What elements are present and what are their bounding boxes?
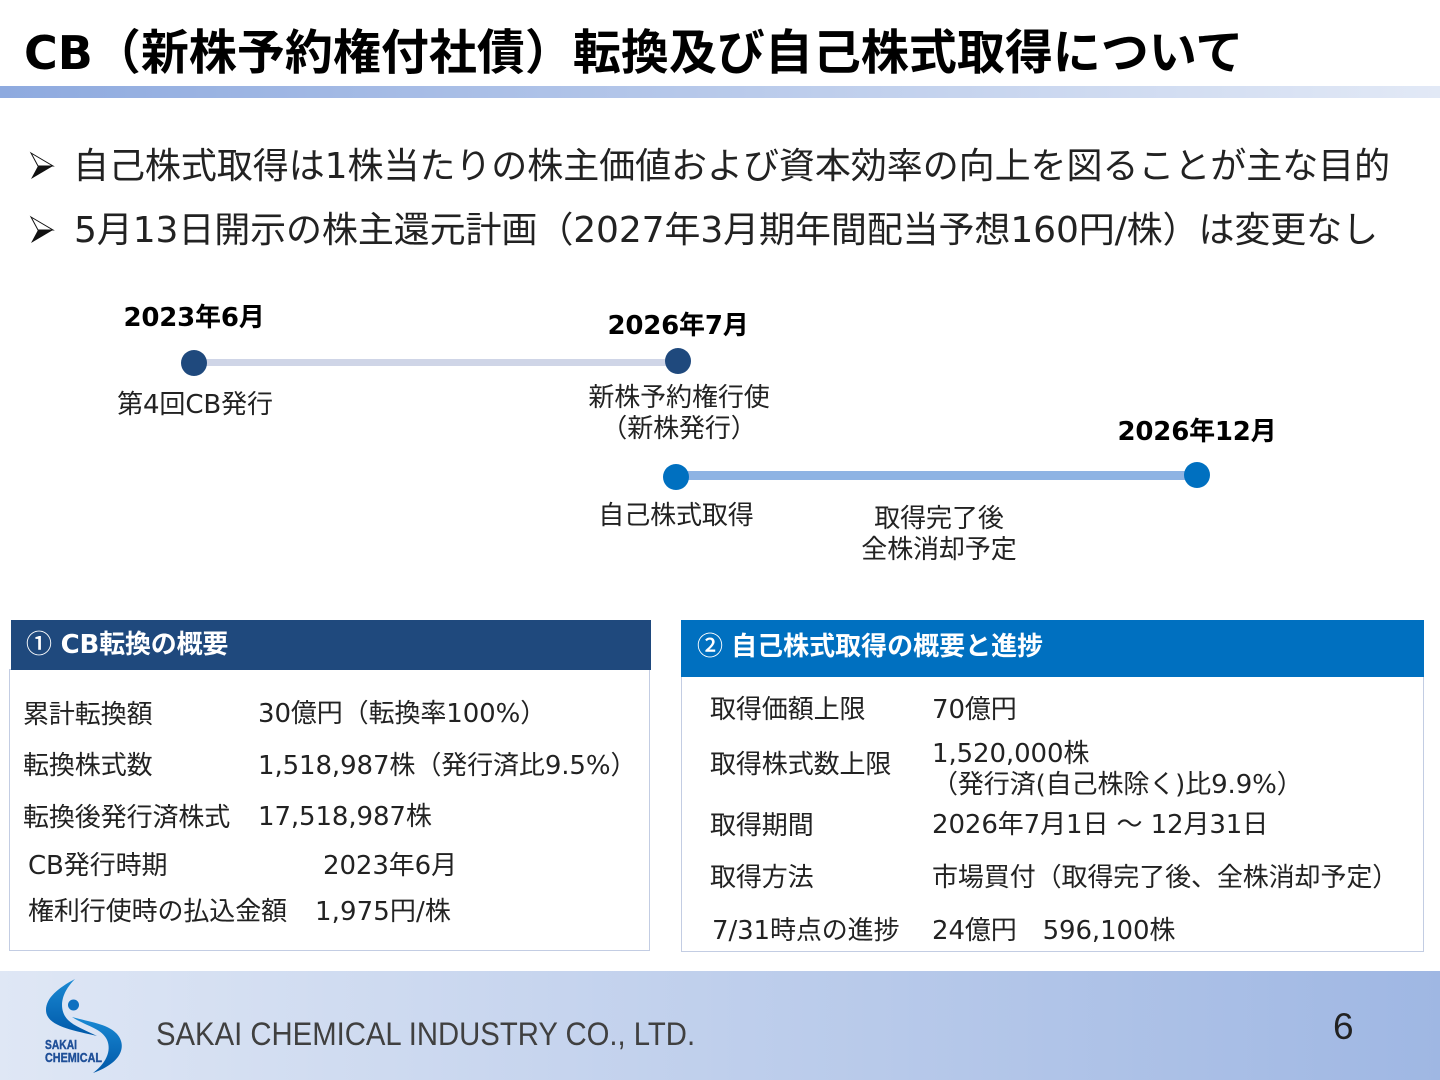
row value: 1,975円/株 xyxy=(315,897,451,927)
row: 転換株式数 xyxy=(23,751,153,781)
page number: 6 xyxy=(1333,1006,1353,1047)
timeline: CB issue to exercise xyxy=(117,303,770,444)
row: 取得期間 xyxy=(710,811,814,841)
milestone dot xyxy=(181,350,207,376)
milestone dot xyxy=(663,464,689,490)
row: 累計転換額 xyxy=(23,700,153,730)
logo text: SAKAI xyxy=(45,1037,77,1052)
row: CB発行時期 xyxy=(28,851,167,881)
row value: 1,518,987株（発行済比9.5%） xyxy=(258,751,636,781)
icon: company logo xyxy=(45,979,122,1073)
title: CB（新株予約権付社債）転換及び自己株式取得について xyxy=(24,25,1243,81)
panel body xyxy=(9,669,650,951)
milestone dot xyxy=(665,348,691,374)
heading text: ② 自己株式取得の概要と進捗 xyxy=(697,626,1043,663)
title gradient bar xyxy=(0,86,1440,98)
label: 全株消却予定 xyxy=(861,535,1017,565)
row value: 70億円 xyxy=(932,695,1017,725)
date: 2023年6月 xyxy=(123,303,265,333)
logo text: CHEMICAL xyxy=(45,1050,102,1065)
bullet list xyxy=(30,146,1390,251)
date: 2026年7月 xyxy=(607,311,749,341)
row value: 市場買付（取得完了後、全株消却予定） xyxy=(932,863,1398,893)
icon: bullet arrows xyxy=(30,152,55,243)
row: 取得株式数上限 xyxy=(710,750,891,780)
label: 新株予約権行使 xyxy=(588,383,770,413)
label: 自己株式取得 xyxy=(598,501,754,531)
bullet two: 5月13日開示の株主還元計画（2027年3月期年間配当予想160円/株）は変更なし xyxy=(74,210,1378,251)
row value: 17,518,987株 xyxy=(258,802,432,832)
date: 2026年12月 xyxy=(1118,417,1276,447)
row value: 30億円（転換率100%） xyxy=(258,699,546,729)
row: 権利行使時の払込金額 xyxy=(28,897,287,927)
row: 7/31時点の進捗 xyxy=(712,916,900,946)
row value: 2023年6月 xyxy=(323,851,457,881)
panel: CB conversion summary xyxy=(9,620,651,951)
row: 転換後発行済株式 xyxy=(23,803,230,833)
timeline: buyback xyxy=(598,417,1276,565)
panel heading xyxy=(681,620,1424,677)
panel body xyxy=(681,676,1424,952)
row value second line: （発行済(自己株除く)比9.9%） xyxy=(932,770,1303,800)
row value: 2026年7月1日 ～ 12月31日 xyxy=(932,810,1268,840)
row value: 24億円 596,100株 xyxy=(932,916,1175,946)
footer band xyxy=(0,971,1440,1080)
company name: SAKAI CHEMICAL INDUSTRY CO., LTD. xyxy=(156,1016,695,1052)
milestone dot xyxy=(1184,462,1210,488)
panel: share buyback summary xyxy=(681,620,1424,952)
row: 取得価額上限 xyxy=(710,695,865,725)
row value: 1,520,000株 xyxy=(932,739,1089,769)
bullet one: 自己株式取得は1株当たりの株主価値および資本効率の向上を図ることが主な目的 xyxy=(73,146,1390,187)
label: 取得完了後 xyxy=(874,504,1004,534)
label: 第4回CB発行 xyxy=(117,390,273,420)
line xyxy=(194,359,678,366)
label: （新株発行） xyxy=(601,414,757,444)
line xyxy=(676,471,1197,480)
panel heading xyxy=(11,620,651,670)
row: 取得方法 xyxy=(710,863,814,893)
heading text: ① CB転換の概要 xyxy=(26,624,228,661)
